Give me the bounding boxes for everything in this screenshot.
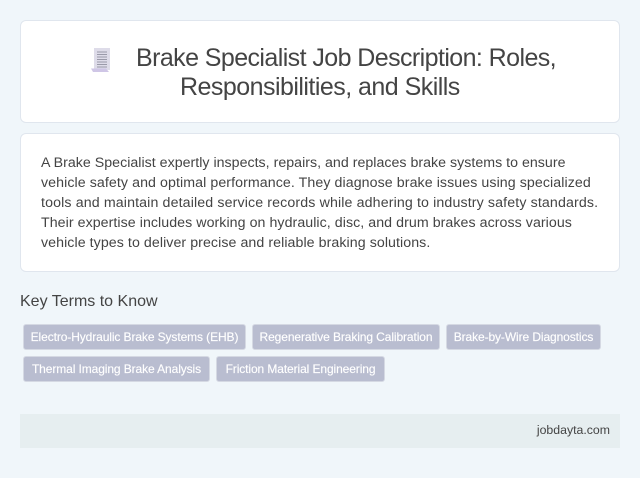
tag [446,324,601,350]
tag [23,324,246,350]
footer text: jobdayta.com [537,423,610,437]
description text [41,155,598,251]
title: Brake Specialist Job Description: Roles, [136,44,556,72]
panel: title card [20,20,620,123]
tag: Friction Material Engineering [226,362,375,376]
description text: vehicle safety and optimal performance. They diagnose brake issues using specialized [41,175,591,191]
tag: Brake-by-Wire Diagnostics [454,330,593,344]
title: Responsibilities, and Skills [180,73,460,101]
description text: A Brake Specialist expertly inspects, repairs, and replaces brake systems to ensure [41,155,565,171]
tag: Thermal Imaging Brake Analysis [32,362,201,376]
panel: key term tags [23,324,601,382]
heading: key terms: Key Terms to Know [20,293,158,310]
description text: tools and maintain detailed service records while adhering to industry safety standards. [41,195,598,211]
tag: Electro-Hydraulic Brake Systems (EHB) [31,330,238,344]
tag: Regenerative Braking Calibration [260,330,432,344]
tag [216,356,385,382]
description text: Their expertise includes working on hydraulic, disc, and drum brakes across various [41,215,572,231]
title [136,44,556,101]
icon: document scroll [91,48,110,72]
panel: description card [20,133,620,272]
tag [23,356,210,382]
tag [252,324,440,350]
description text: vehicle types to deliver precise and reliable braking solutions. [41,235,430,251]
footer bar [20,414,620,448]
